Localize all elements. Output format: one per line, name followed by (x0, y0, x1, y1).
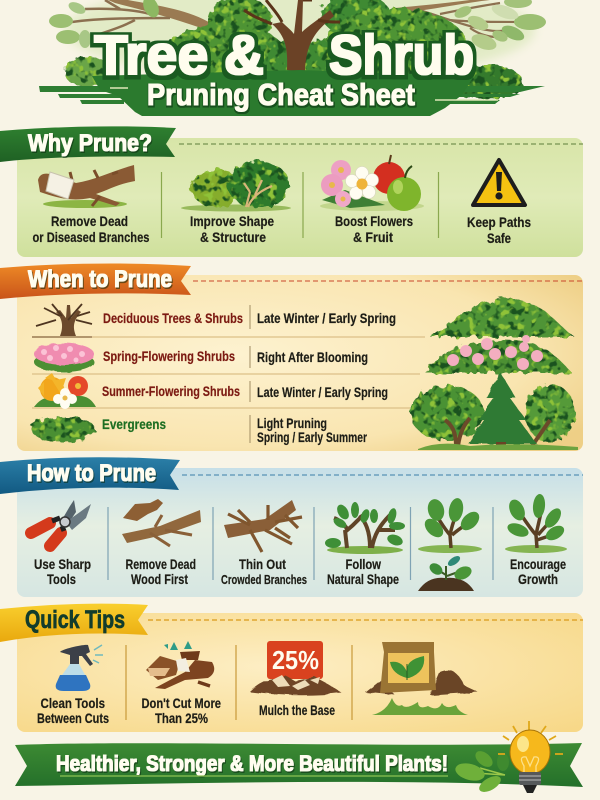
icon: spray bottle (56, 645, 103, 691)
icon: crowded branch (224, 500, 302, 552)
icon: grass tufts (372, 698, 468, 715)
icon: shaped shrubs (181, 161, 291, 212)
label: encourage growth: Growth (518, 571, 558, 587)
title: Tree & Shrub (94, 23, 474, 86)
label: remove dead wood first: Remove Dead (126, 556, 196, 572)
timing: evergreens (257, 415, 367, 445)
label: thin out crowded branches (221, 556, 307, 587)
title: Tree & Shrub: Tree & (94, 23, 264, 86)
column dividers (249, 305, 251, 443)
label: use sharp tools: Use Sharp (34, 556, 91, 572)
icon: cut wood chunks (146, 641, 214, 689)
icon: 25 percent sign on soil (250, 641, 342, 695)
label: use sharp tools (34, 556, 91, 587)
heading ribbon: why prune (0, 126, 176, 162)
icon: light bulb (498, 721, 563, 793)
right branch with leaves (395, 0, 546, 53)
label: don't cut more than 25%: Don't Cut More (142, 695, 221, 711)
label: follow natural shape: Natural Shape (327, 571, 399, 587)
heading ribbon: how to prune: How to Prune (27, 460, 156, 487)
icon: mulch bag (365, 642, 478, 695)
heading ribbon: quick tips: Quick Tips (25, 606, 125, 634)
icon: evergreen shrub (31, 416, 95, 442)
how to prune dashed rule (182, 474, 583, 476)
label: thin out crowded branches: Thin Out (239, 556, 286, 572)
icon: growing plant (505, 494, 567, 553)
timing: deciduous: Late Winter / Early Spring (257, 310, 396, 326)
left branch with leaves (49, 0, 212, 48)
label: improve shape and structure (190, 213, 274, 245)
when to prune dashed rule (193, 280, 583, 282)
icon: young plant (418, 497, 483, 553)
label: remove dead or diseased branches: or Diseased Branches (32, 229, 150, 245)
label: use sharp tools: Tools (47, 571, 76, 587)
timing: evergreens: Light Pruning (257, 415, 327, 431)
row separators (32, 337, 425, 408)
label: boost flowers and fruit: & Fruit (353, 229, 393, 245)
label: spring-flowering: Spring-Flowering Shrubs (103, 348, 235, 364)
icon: 25 percent sign on soil: 25% (272, 645, 319, 675)
row: spring-flowering shrubs (34, 343, 368, 372)
icon: bare tree (32, 304, 92, 337)
heading ribbon: quick tips (0, 604, 148, 642)
icon: pink flowering shrub (34, 343, 94, 372)
label: remove dead wood first: Wood First (131, 571, 188, 587)
label: keep paths safe: Safe (487, 230, 511, 246)
banner underline (60, 775, 448, 777)
icon: bandaged branch (38, 165, 135, 208)
how to prune background (17, 468, 583, 597)
row: deciduous trees and shrubs (32, 304, 396, 337)
label: clean tools between cuts: Between Cuts (37, 710, 109, 726)
quick tips background (17, 613, 583, 732)
illustration: trees and fir (410, 372, 578, 450)
banner text: Healthier, Stronger & More Beautiful Plants! (56, 751, 448, 776)
row: evergreens (31, 415, 367, 445)
label: follow natural shape: Follow (346, 556, 381, 572)
label: deciduous: Deciduous Trees & Shrubs (103, 310, 243, 326)
label: clean tools between cuts: Clean Tools (40, 695, 105, 711)
label: improve shape and structure: Improve Shape (190, 213, 274, 229)
label: boost flowers and fruit (335, 213, 413, 245)
quick tips dashed rule (148, 619, 583, 621)
dividers (108, 507, 493, 580)
label: clean tools between cuts (37, 695, 109, 726)
icon: flowers and fruit (320, 155, 424, 211)
heading ribbon: how to prune (0, 457, 180, 494)
label: summer-flowering: Summer-Flowering Shrubs (102, 383, 240, 399)
panel: quick tips (0, 604, 583, 732)
panel: how to prune (0, 457, 583, 597)
when to prune background (17, 275, 583, 451)
timing: evergreens: Spring / Early Summer (257, 429, 367, 445)
title: Tree & Shrub: Shrub (329, 23, 474, 86)
icon: natural shape tree (325, 502, 405, 554)
banner ribbon (15, 743, 583, 787)
dividers (162, 172, 438, 238)
central tree (244, 0, 340, 72)
icon: dead wood (122, 499, 201, 546)
label: evergreens: Evergreens (102, 416, 166, 432)
label: mulch the base: Mulch the Base (259, 702, 335, 718)
heading ribbon: when to prune (0, 264, 191, 299)
label: thin out crowded branches: Crowded Branches (221, 572, 307, 587)
soft glow behind branches (65, 0, 535, 80)
subtitle: Pruning Cheat Sheet (147, 77, 415, 112)
icon: leaves (453, 748, 509, 795)
icon: pruning shears (31, 500, 91, 546)
why prune background (17, 138, 583, 257)
label: follow natural shape (327, 556, 399, 587)
row: summer-flowering shrubs (34, 373, 388, 409)
label: keep paths safe: Keep Paths (467, 214, 531, 230)
label: improve shape and structure: & Structure (200, 229, 266, 245)
illustration: flowering dome shrub (425, 335, 572, 373)
timing: summer-flowering: Late Winter / Early Spring (257, 384, 388, 400)
header illustration (39, 0, 546, 116)
title banner (39, 70, 545, 116)
heading ribbon: when to prune: When to Prune (28, 266, 172, 293)
label: boost flowers and fruit: Boost Flowers (335, 213, 413, 229)
label: encourage growth (510, 556, 566, 587)
label: encourage growth: Encourage (510, 556, 566, 572)
label: remove dead or diseased branches: Remove Dead (51, 213, 128, 229)
closing banner (15, 721, 583, 795)
why prune dashed rule (179, 143, 583, 145)
illustration: pruned dome shrub (430, 298, 575, 337)
icon: warning sign (473, 160, 525, 205)
heading ribbon: why prune: Why Prune? (28, 130, 152, 157)
icon: seedling in soil (418, 554, 474, 591)
label: don't cut more than 25% (142, 695, 221, 726)
shrub foliage mass (64, 0, 523, 99)
label: remove dead wood first (126, 556, 196, 587)
icon: summer flowers (34, 373, 96, 409)
timing: spring-flowering: Right After Blooming (257, 349, 368, 365)
label: remove dead or diseased branches (32, 213, 150, 245)
label: don't cut more than 25%: Than 25% (155, 710, 208, 726)
dividers (126, 645, 352, 720)
panel: why prune (0, 126, 583, 257)
label: keep paths safe (467, 214, 531, 246)
panel: when to prune (0, 264, 583, 451)
